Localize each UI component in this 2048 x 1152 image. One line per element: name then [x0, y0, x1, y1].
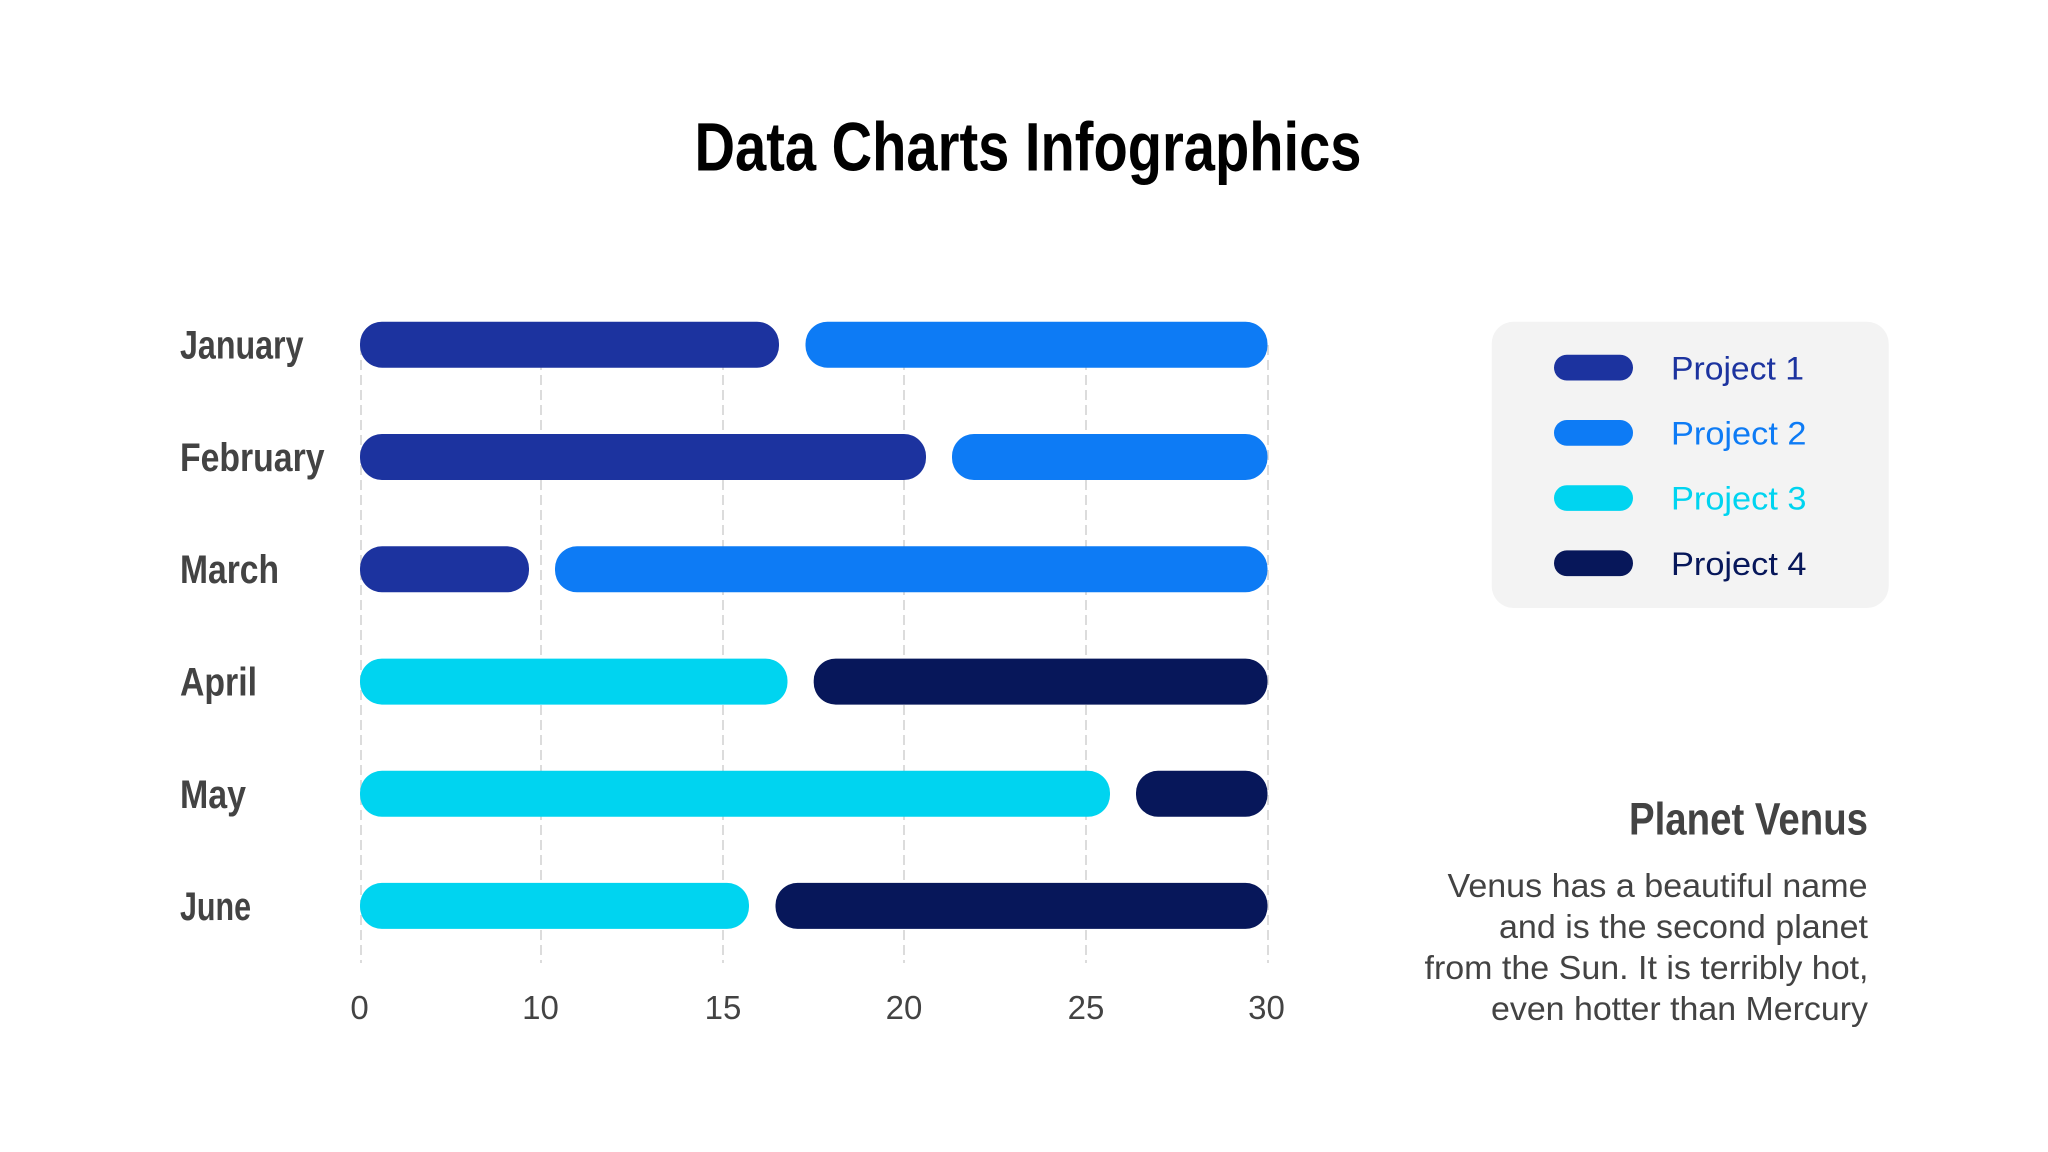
legend item: Project 4	[1554, 546, 1806, 582]
x axis labels: 10	[522, 989, 559, 1026]
legend item: Project 1: Project 1	[1671, 350, 1804, 386]
x axis labels	[350, 989, 1285, 1026]
legend item: Project 3: Project 3	[1671, 481, 1806, 517]
title: Data Charts Infographics	[694, 109, 1362, 186]
row labels: February	[180, 436, 325, 480]
x axis labels: 0	[350, 989, 369, 1026]
bars: April	[360, 659, 1268, 705]
x axis labels: 20	[886, 989, 922, 1026]
panel: legend	[1492, 322, 1889, 608]
text block: Venus description: from the Sun. It is terribly hot,	[1424, 949, 1868, 986]
bars: June	[360, 883, 1268, 929]
text block: Venus description	[1424, 867, 1869, 1027]
x axis labels: 15	[705, 989, 741, 1026]
legend item: Project 1	[1554, 350, 1804, 386]
row labels: May	[180, 773, 247, 817]
row labels: January	[180, 323, 304, 367]
row labels: June	[180, 885, 251, 929]
legend item: Project 4: Project 4	[1671, 546, 1806, 582]
bars: March	[360, 546, 1268, 592]
legend item: Project 2: Project 2	[1671, 416, 1806, 452]
bars: January	[360, 322, 1268, 368]
text block: Venus description: and is the second planet	[1499, 908, 1868, 945]
heading: Planet Venus: Planet Venus	[1629, 793, 1868, 844]
text block: Venus description: even hotter than Mercury	[1491, 990, 1869, 1027]
row labels	[180, 323, 325, 929]
bars: February	[360, 434, 1268, 480]
gantt chart	[180, 322, 1285, 1026]
row labels: April	[180, 660, 257, 704]
legend item: Project 3	[1554, 481, 1806, 517]
bars: May	[360, 771, 1268, 817]
text block: Venus description: Venus has a beautiful name	[1448, 867, 1868, 904]
x axis labels: 25	[1068, 989, 1104, 1026]
legend item: Project 2	[1554, 416, 1806, 452]
row labels: March	[180, 548, 279, 592]
x axis labels: 30	[1248, 989, 1285, 1026]
